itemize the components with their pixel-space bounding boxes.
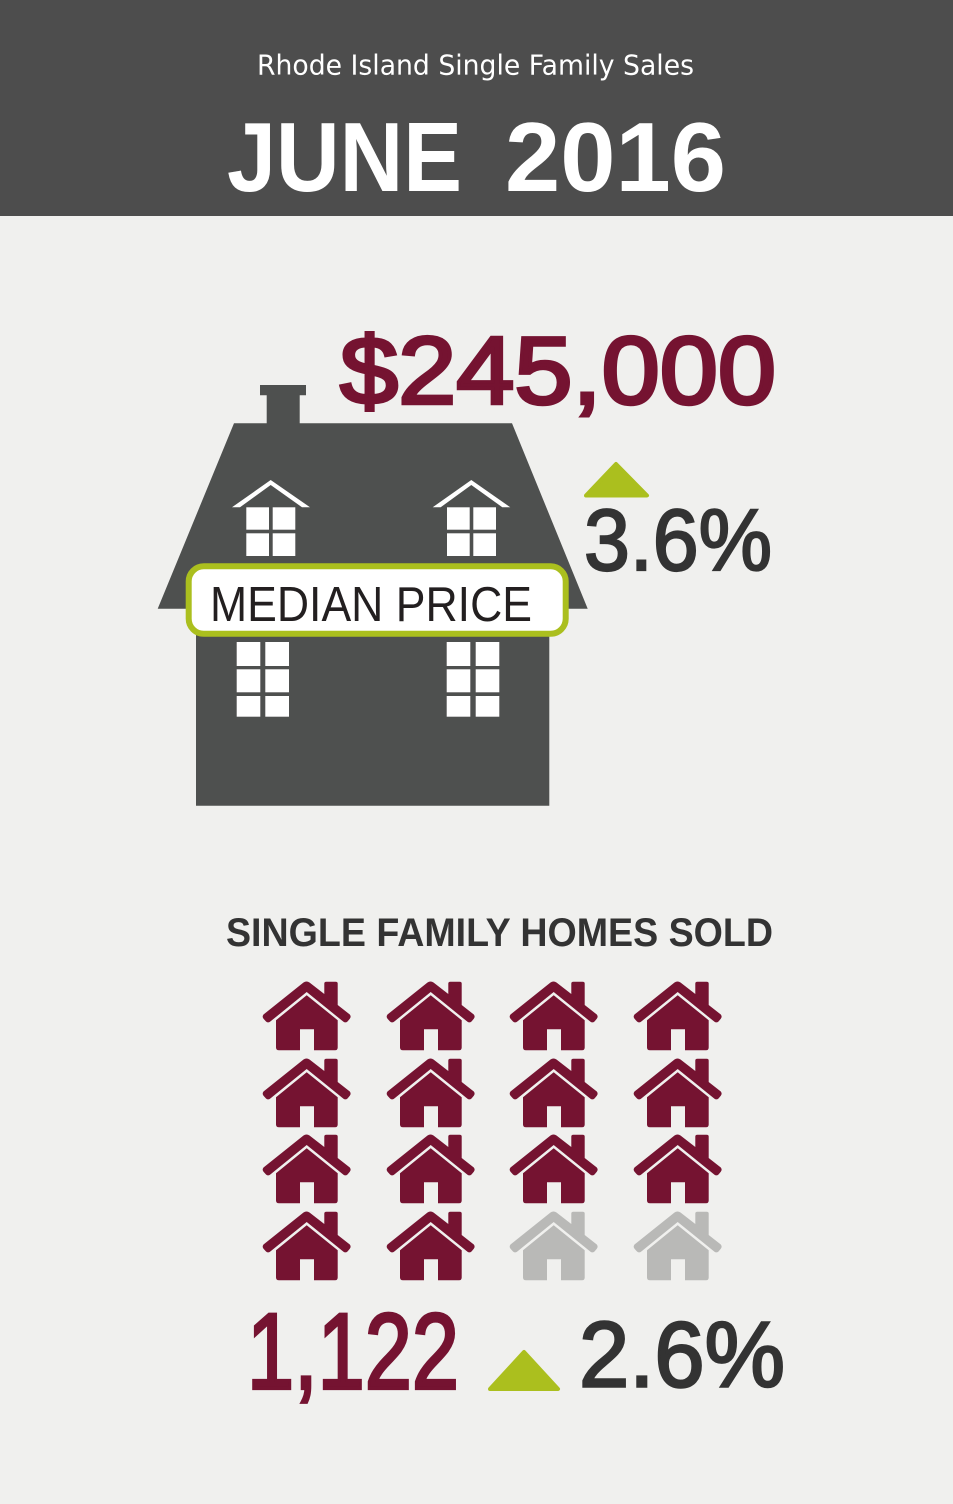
- median price change: 3.6%: [584, 492, 772, 589]
- homes sold value: 1,122: [247, 1290, 459, 1412]
- subtitle: Rhode Island Single Family Sales: [257, 48, 694, 82]
- right lower window: [447, 642, 499, 717]
- up arrow: homes sold: [490, 1352, 558, 1389]
- median price label: MEDIAN PRICE: [210, 578, 532, 632]
- up arrow: median price: [586, 464, 647, 496]
- sold house icons: [263, 982, 722, 1280]
- icon: large house: [158, 385, 588, 806]
- left lower window: [237, 642, 289, 717]
- remaining grey house icons: [510, 1212, 722, 1280]
- title: [227, 102, 726, 212]
- title: 2016: [505, 102, 726, 212]
- homes sold change: 2.6%: [579, 1302, 785, 1406]
- pictogram: homes sold: [263, 982, 722, 1280]
- median price value: $245,000: [340, 318, 776, 424]
- header banner: [0, 0, 953, 216]
- title: JUNE: [227, 102, 462, 212]
- homes sold heading: SINGLE FAMILY HOMES SOLD: [226, 911, 773, 955]
- left dormer: [232, 480, 310, 556]
- right dormer: [433, 480, 510, 556]
